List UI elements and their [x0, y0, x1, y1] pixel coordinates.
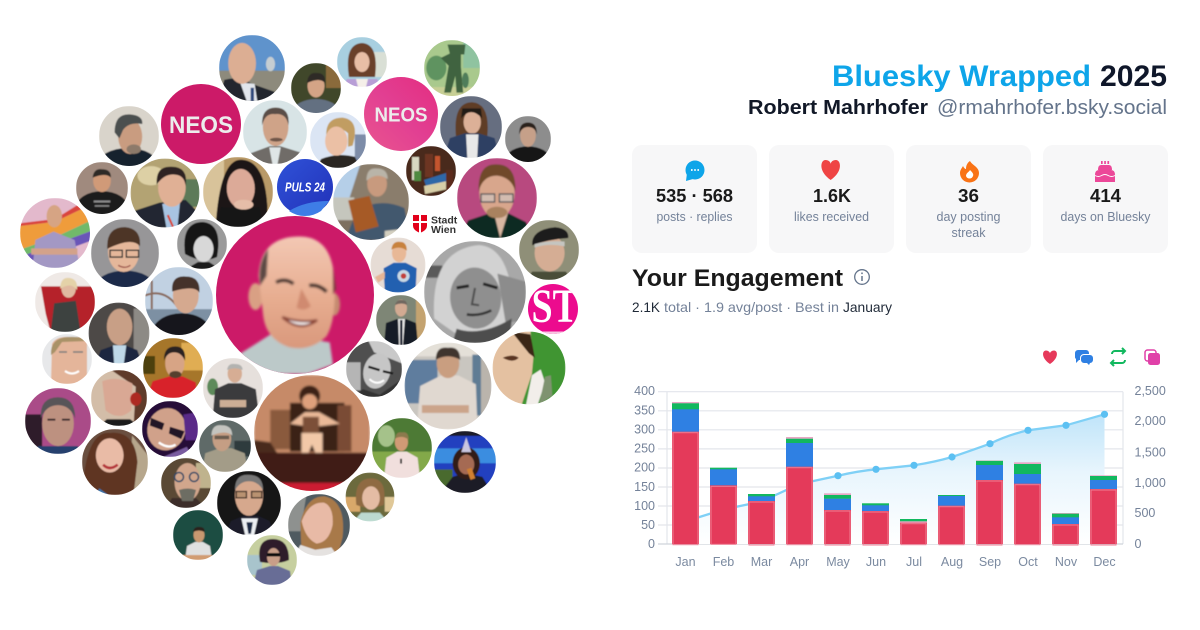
month labels: Mar [751, 555, 772, 569]
left axis labels: 0 [648, 537, 655, 551]
avatar: man in red shirt [143, 338, 203, 398]
grid lines [658, 392, 1123, 544]
bar: December [1090, 475, 1117, 545]
author name and handle [748, 97, 1167, 119]
right axis labels: 0 [1134, 537, 1142, 551]
panel: posts and replies: 535 · 568 [656, 186, 733, 206]
avatar: goatee man with round glasses [161, 458, 211, 508]
month labels: Oct [1018, 555, 1038, 569]
avatar: central portrait on magenta [216, 216, 374, 374]
right axis labels [1134, 384, 1166, 551]
avatar: NEOS logo [161, 84, 241, 164]
icon: legend reposts [1111, 348, 1125, 366]
left axis labels: 250 [634, 442, 655, 456]
panel: days on Bluesky [1043, 145, 1168, 253]
avatar: man in park [372, 418, 432, 478]
icon: legend likes [1043, 350, 1057, 364]
avatar: grey-haired man [99, 106, 159, 166]
avatar bubble cluster [20, 35, 579, 585]
bar: October [1014, 462, 1041, 545]
avatar: man with glasses on pink [457, 158, 537, 238]
icon: legend quotes [1145, 350, 1160, 365]
avatar: black and white older woman [424, 241, 526, 343]
left axis labels: 300 [634, 422, 655, 436]
month labels: Feb [713, 555, 734, 569]
panel: day posting streak: 36 [958, 186, 979, 206]
avatar: blonde woman [310, 112, 366, 168]
left axis labels: 150 [634, 480, 655, 494]
bar: September [976, 460, 1003, 545]
right axis labels: 1,500 [1134, 446, 1166, 460]
title: Bluesky Wrapped 2025: 2025 [1100, 60, 1167, 93]
avatar: older man in grey sweater [203, 358, 263, 418]
month labels: Nov [1055, 555, 1078, 569]
avatar: man with bridge [145, 267, 213, 335]
icon: heart [821, 160, 840, 180]
avatar: woman with long dark hair [203, 157, 273, 227]
avatar: bottles on a shelf [406, 146, 456, 196]
author name and handle: @rmahrhofer.bsky.social [937, 97, 1167, 119]
month labels: Dec [1093, 555, 1116, 569]
panel: likes received: likes received [794, 210, 869, 224]
bar: May [824, 493, 851, 545]
avatar: curly-haired woman [346, 472, 394, 522]
avatar: baby sepia photo [254, 375, 370, 494]
month labels: Jan [675, 555, 696, 569]
left axis labels: 50 [641, 518, 655, 532]
bar: July [900, 519, 927, 545]
icon: flame [960, 161, 979, 182]
logo: Stadt Wien: Wien [431, 224, 456, 236]
icon: birthday cake [1095, 161, 1115, 182]
panel: posts and replies [632, 145, 757, 253]
panel: days on Bluesky: 414 [1090, 186, 1121, 206]
icon: chat bubble [686, 160, 704, 181]
engagement summary: total · 1.9 avg/post · Best in [664, 299, 839, 315]
right axis labels: 500 [1134, 506, 1155, 520]
avatar: man with glasses and tie grey background [243, 100, 307, 164]
right axis labels: 1,000 [1134, 476, 1166, 490]
avatar: NEOS logo gradient [364, 77, 438, 151]
avatar: woman with bangs [440, 96, 502, 158]
avatar: man with lanyard [130, 158, 200, 228]
icon: legend replies [1075, 350, 1093, 365]
icon: info [855, 270, 869, 284]
panel: day posting streak: streak [952, 226, 986, 240]
avatar: NEOS logo gradient: NEOS [374, 104, 428, 126]
left axis labels: 100 [634, 499, 655, 513]
avatar: green statue [424, 40, 480, 98]
month labels: Sep [979, 555, 1001, 569]
avatar: blonde woman close-up [288, 494, 350, 556]
avatar: bald man with glasses on dark [88, 302, 150, 364]
avatar: older man with glasses [199, 420, 251, 472]
avatar: man in white shirt arms crossed [404, 342, 492, 430]
month labels: Jul [906, 555, 922, 569]
left axis labels: 200 [634, 460, 655, 474]
avatar: woman with lilac blazer [337, 37, 387, 87]
avatar: black and white woman [177, 219, 227, 269]
logo: Stadt Wien: Stadt [431, 214, 458, 226]
avatar: woman close-up [91, 370, 147, 426]
panel: likes received [769, 145, 894, 253]
author name and handle: Robert Mahrhofer [748, 97, 928, 119]
avatar: smiling woman long hair [82, 429, 148, 495]
month labels [675, 555, 1116, 569]
bar: June [862, 503, 889, 545]
bar: August [938, 495, 965, 545]
left axis labels [634, 384, 655, 551]
avatar: PULS 24 logo [277, 159, 333, 216]
avatar: man in beret [519, 220, 579, 280]
panel: likes received: 1.6K [813, 186, 851, 206]
legend icons [1043, 348, 1160, 366]
bar: November [1052, 513, 1079, 545]
month labels: May [826, 555, 851, 569]
avatar: man with glasses and tie on dark [217, 471, 281, 535]
avatar: young man with glasses [91, 219, 159, 287]
avatar: man in front of rainbow flag [20, 198, 97, 268]
panel: days on Bluesky: days on Bluesky [1060, 210, 1151, 224]
month labels: Jun [866, 555, 886, 569]
avatar: woman with party hat [434, 431, 496, 493]
bar: January [672, 402, 699, 545]
avatar: man in suit with bookshelf [376, 295, 426, 345]
avatar: PULS 24 logo: PULS 24 [285, 180, 325, 194]
avatar: man on dark green wall [173, 510, 223, 560]
cumulative line [686, 411, 1108, 521]
bar: April [786, 437, 813, 545]
avatar: man in blue T-shirt [370, 238, 426, 292]
avatar: woman on red chair [35, 272, 95, 332]
left axis labels: 400 [634, 384, 655, 398]
avatar: older man on purple [25, 388, 91, 454]
right axis labels: 2,000 [1134, 414, 1166, 428]
avatar: woman with sunglasses [247, 535, 297, 585]
left axis labels: 350 [634, 404, 655, 418]
engagement summary: January [843, 299, 892, 315]
engagement summary: 2.1K [632, 299, 661, 315]
title: Bluesky Wrapped 2025: Bluesky Wrapped [832, 60, 1091, 93]
panel: posts and replies: posts · replies [656, 210, 732, 224]
avatar: man with glasses in purple light [142, 401, 198, 457]
panel: day posting streak: day posting [936, 210, 1001, 224]
avatar: NEOS logo: NEOS [169, 112, 233, 139]
avatar: man with dark shirt grey background [505, 116, 551, 162]
panel: day posting streak [906, 145, 1031, 253]
heading: Your Engagement: Your Engagement [632, 265, 843, 292]
bar: February [710, 468, 737, 544]
logo: Stadt Wien [413, 214, 458, 236]
avatar: half face on green [492, 332, 566, 404]
avatar: ST logo: ST [532, 280, 578, 333]
avatar: man in beanie with book [333, 164, 411, 243]
avatar: man in black T-shirt [76, 162, 128, 214]
engagement summary [632, 299, 892, 315]
chart: monthly engagement stacked bars with cumulative line [634, 384, 1166, 569]
month labels: Apr [790, 555, 809, 569]
avatar: black and white man with glasses [346, 341, 402, 397]
avatar: bald man with city [219, 35, 285, 104]
cumulative area [686, 414, 1104, 544]
avatar: smiling man with glasses [42, 334, 92, 384]
stacked bars [672, 402, 1117, 545]
right axis labels: 2,500 [1134, 384, 1166, 398]
month labels: Aug [941, 555, 963, 569]
avatar: dark suit man outdoors [291, 63, 341, 113]
bar: March [748, 494, 775, 545]
